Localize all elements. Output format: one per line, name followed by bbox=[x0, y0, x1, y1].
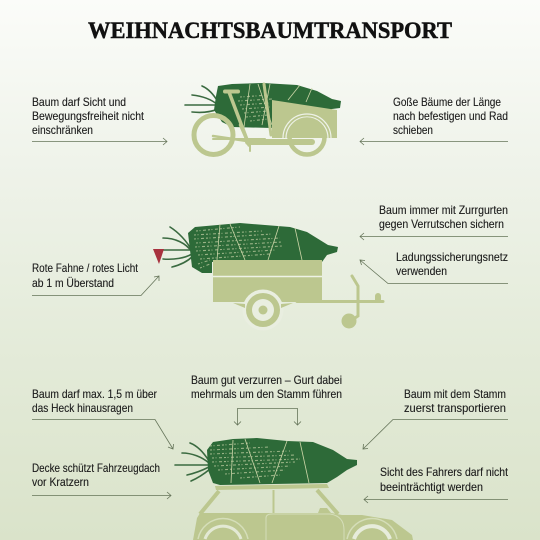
bike frame bbox=[213, 84, 312, 151]
rear wheel bbox=[354, 526, 390, 539]
text: cargo net bbox=[396, 251, 508, 278]
text: blanket bbox=[32, 462, 160, 489]
text: trunk first bbox=[404, 388, 506, 415]
bike straps bbox=[244, 84, 312, 127]
arrow: sight and movement bbox=[32, 138, 167, 145]
text: large trees: schieben bbox=[393, 124, 433, 137]
jack wheel bbox=[342, 314, 356, 328]
arrow: blanket bbox=[32, 492, 171, 499]
text: cargo net: Ladungssicherungsnetz bbox=[396, 251, 508, 264]
text: cargo net: verwenden bbox=[396, 265, 447, 278]
red flag bbox=[153, 249, 164, 264]
arrow: red flag bbox=[32, 276, 159, 296]
roof rack bbox=[215, 484, 329, 490]
trailer box bbox=[213, 260, 322, 302]
text: large trees bbox=[393, 96, 508, 137]
bike tree bbox=[214, 83, 341, 128]
text: driver's view: Sicht des Fahrers darf nicht bbox=[380, 466, 509, 479]
arrow: trunk first bbox=[363, 420, 508, 449]
arrow: large trees bbox=[360, 138, 508, 145]
text: blanket: Decke schützt Fahrzeugdach bbox=[32, 462, 160, 475]
car tree straps bbox=[231, 439, 309, 483]
illustration: trailer with tree bbox=[153, 223, 383, 330]
text: driver's view: beeinträchtigt werden bbox=[380, 481, 483, 494]
arrow: driver's view bbox=[364, 496, 508, 503]
bike rear wheel bbox=[194, 116, 233, 154]
trailer box divider bbox=[213, 276, 322, 278]
text: sight and movement: Baum darf Sicht und bbox=[32, 96, 126, 109]
text: red flag bbox=[32, 262, 139, 290]
text: overhang: Baum darf max. 1,5 m über bbox=[32, 388, 157, 401]
bike cargo box bbox=[272, 100, 337, 138]
trailer wheel arch bbox=[242, 290, 284, 330]
text: lash well: mehrmals um den Stamm führen bbox=[191, 388, 342, 401]
text: driver's view bbox=[380, 466, 509, 494]
arrow: cargo net bbox=[360, 260, 508, 284]
title: WEIHNACHTSBAUMTRANSPORT bbox=[88, 18, 452, 43]
trailer wheel bbox=[246, 293, 280, 327]
text: trunk first: Baum mit dem Stamm bbox=[404, 388, 506, 401]
text: lash well: Baum gut verzurren – Gurt dabei bbox=[191, 374, 342, 387]
text: overhang: das Heck hinausragen bbox=[32, 402, 133, 415]
text: large trees: nach befestigen und Rad bbox=[393, 110, 508, 123]
illustration: car with tree bbox=[175, 438, 413, 540]
text: blanket: vor Kratzern bbox=[32, 476, 89, 489]
trailer mudguard wings bbox=[233, 303, 293, 308]
text: red flag: Rote Fahne / rotes Licht bbox=[32, 262, 139, 275]
text: lashing straps bbox=[379, 204, 508, 231]
car tree bbox=[207, 438, 357, 485]
trailer tree branches bbox=[163, 227, 193, 267]
car tree branches bbox=[175, 443, 210, 481]
bike tree branches bbox=[185, 86, 218, 112]
arrow: lashing straps bbox=[360, 233, 508, 240]
text: red flag: ab 1 m Überstand bbox=[32, 277, 114, 290]
text: large trees: Goße Bäume der Länge bbox=[393, 96, 501, 109]
rear wheel arch bbox=[347, 519, 397, 539]
trailer straps bbox=[217, 224, 302, 260]
text: lashing straps: Baum immer mit Zurrgurten bbox=[379, 204, 508, 217]
trailer tree bbox=[188, 223, 338, 273]
text: sight and movement: Bewegungsfreiheit nicht bbox=[32, 110, 145, 123]
front wheel bbox=[205, 526, 241, 539]
car tree texture bbox=[210, 443, 300, 478]
arrow: overhang bbox=[32, 420, 174, 449]
bike front wheel bbox=[290, 120, 324, 154]
arrows: lash well bbox=[234, 408, 301, 425]
car window pillars bbox=[200, 490, 338, 514]
car body bbox=[193, 508, 413, 540]
text: lash well bbox=[191, 374, 342, 401]
trailer drawbar and jack bbox=[297, 276, 383, 320]
bike tree texture bbox=[238, 95, 272, 121]
trailer tree texture bbox=[194, 227, 282, 268]
illustration: cargo bike with tree bbox=[185, 83, 341, 154]
bike front fender bbox=[283, 114, 331, 138]
text: sight and movement: einschränken bbox=[32, 124, 93, 137]
car door line bbox=[266, 514, 344, 540]
front wheel arch bbox=[198, 519, 248, 539]
text: lashing straps: gegen Verrutschen sichern bbox=[379, 218, 504, 231]
text: trunk first: zuerst transportieren bbox=[404, 402, 506, 415]
text: sight and movement bbox=[32, 96, 145, 137]
text: overhang bbox=[32, 388, 157, 415]
